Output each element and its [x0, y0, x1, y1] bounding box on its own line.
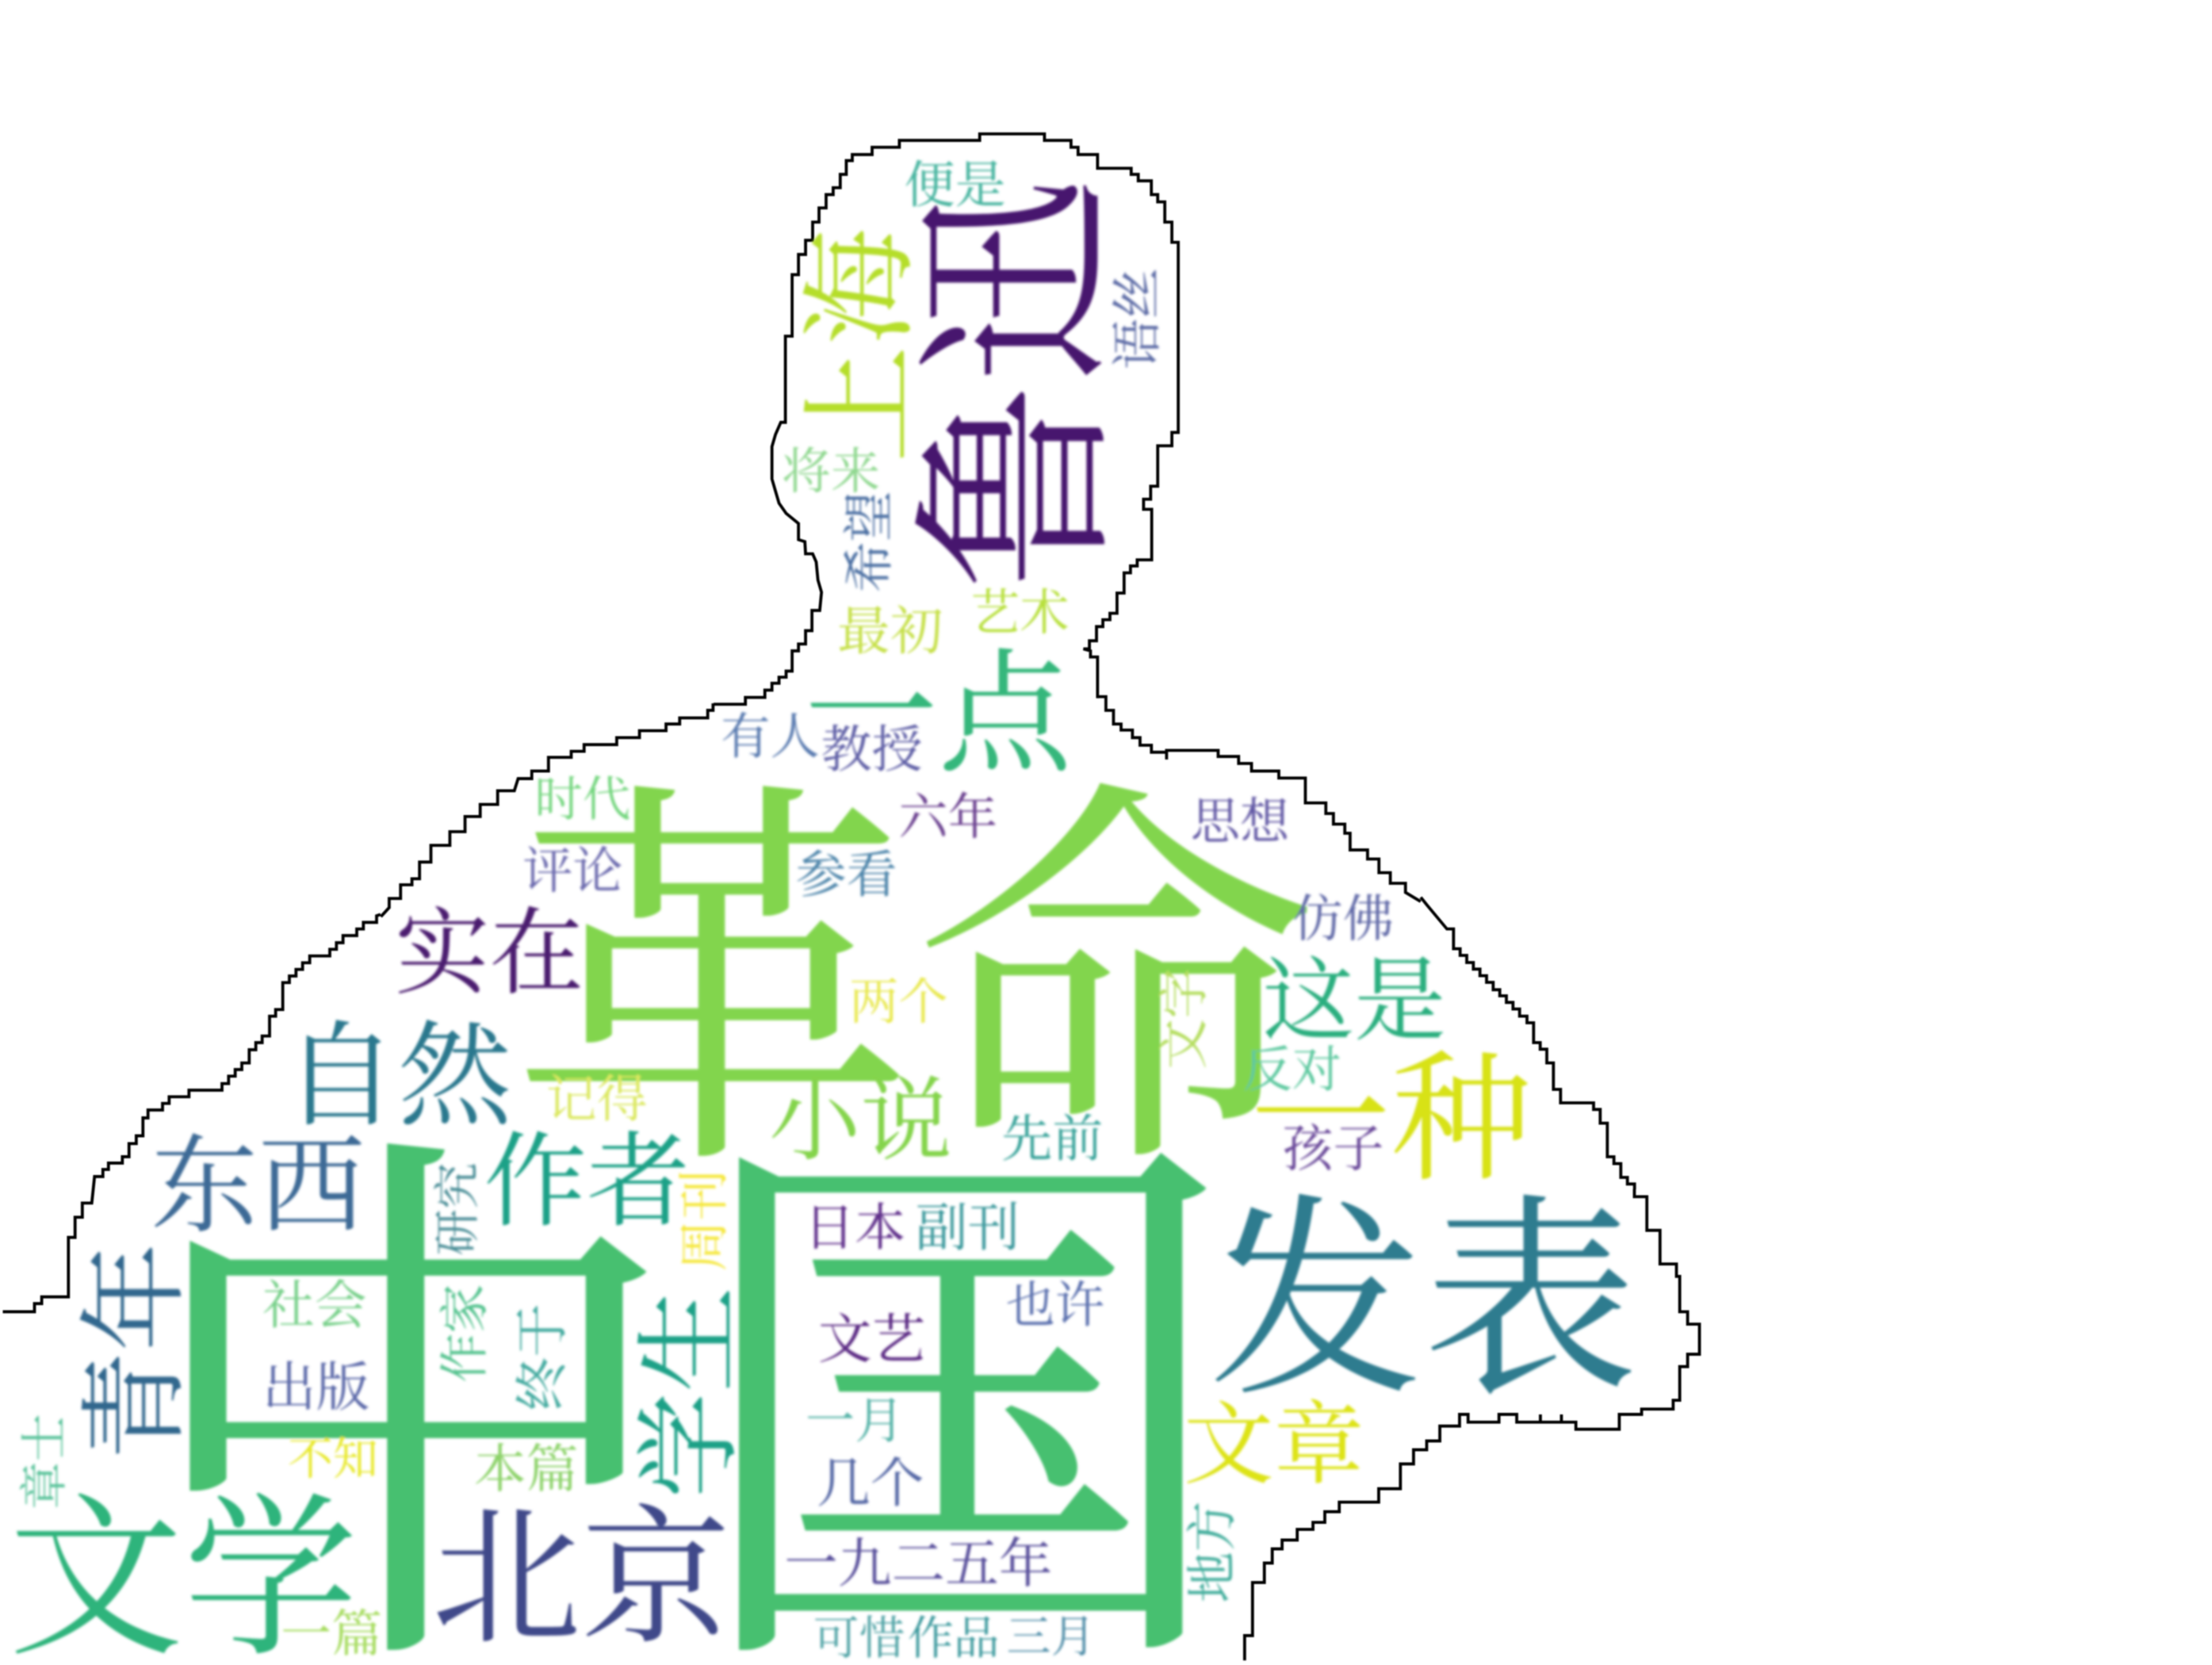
word: 最初: 最初 [837, 603, 943, 661]
word: 一篇: 一篇 [281, 1606, 382, 1663]
word: 希望: 希望 [842, 491, 898, 592]
word: 文章: 文章 [1184, 1396, 1364, 1496]
word: 艺术: 艺术 [970, 587, 1070, 641]
word: 出版: 出版 [262, 1358, 369, 1418]
word: 三月: 三月 [1007, 1613, 1096, 1663]
word: 实在: 实在 [395, 901, 584, 1006]
word: 反对: 反对 [1243, 1044, 1341, 1098]
word: 可惜: 可惜 [813, 1613, 905, 1664]
word: 记得: 记得 [546, 1072, 648, 1128]
word: 不知: 不知 [288, 1435, 378, 1485]
word: 教授: 教授 [821, 722, 923, 778]
word: 六年: 六年 [898, 791, 997, 845]
word: 鲁迅: 鲁迅 [906, 178, 1134, 590]
word: 学生: 学生 [631, 1287, 748, 1498]
word: 一点: 一点 [804, 641, 1074, 790]
word: 发表: 发表 [1209, 1184, 1638, 1422]
word: 便是: 便是 [905, 158, 1006, 214]
word: 一种: 一种 [1250, 1043, 1532, 1199]
word: 几个: 几个 [817, 1454, 924, 1514]
word: 将来: 将来 [782, 446, 880, 500]
word: 日本: 日本 [804, 1200, 905, 1257]
word: 一九二五年: 一九二五年 [784, 1534, 1052, 1594]
word: 文字: 文字 [1156, 968, 1212, 1070]
word: 上海: 上海 [796, 228, 926, 463]
word: 参看: 参看 [796, 848, 897, 904]
silhouette outline [3, 134, 1699, 1660]
word: 社会: 社会 [262, 1277, 367, 1335]
word: 副刊: 副刊 [916, 1200, 1020, 1257]
word: 小说: 小说 [769, 1071, 952, 1173]
word: 革命: 革命 [511, 766, 1318, 1212]
word: 思想: 思想 [1191, 795, 1290, 849]
word: 两个: 两个 [849, 976, 948, 1030]
word: 语丝: 语丝 [1110, 268, 1166, 369]
word: 地方: 地方 [1184, 1501, 1241, 1602]
word: 研究: 研究 [432, 1162, 484, 1256]
word: 文艺: 文艺 [818, 1310, 925, 1369]
word: 作品: 作品 [908, 1613, 1000, 1664]
word: 终于: 终于 [513, 1303, 572, 1410]
word: 一月: 一月 [806, 1395, 905, 1449]
word: 北京: 北京 [431, 1497, 731, 1663]
word: 周刊: 周刊 [676, 1169, 733, 1271]
word: 自然: 自然 [284, 1015, 514, 1141]
word: 作家: 作家 [438, 1284, 492, 1383]
word: 孩子: 孩子 [1282, 1121, 1383, 1177]
word: 这是: 这是 [1262, 951, 1446, 1053]
word: 本篇: 本篇 [474, 1441, 579, 1498]
word: 作者: 作者 [484, 1126, 690, 1240]
word: 仿佛: 仿佛 [1292, 891, 1394, 947]
word: 也许: 也许 [1006, 1280, 1104, 1334]
word: 有人: 有人 [721, 711, 820, 765]
word: 时代: 时代 [534, 773, 630, 826]
word: 评论: 评论 [522, 844, 623, 899]
word: 青年: 青年 [76, 1243, 197, 1460]
word cloud [9, 158, 1638, 1665]
word: 东西: 东西 [151, 1128, 365, 1246]
word: 章士: 章士 [18, 1414, 71, 1510]
word: 先前: 先前 [1001, 1111, 1103, 1167]
